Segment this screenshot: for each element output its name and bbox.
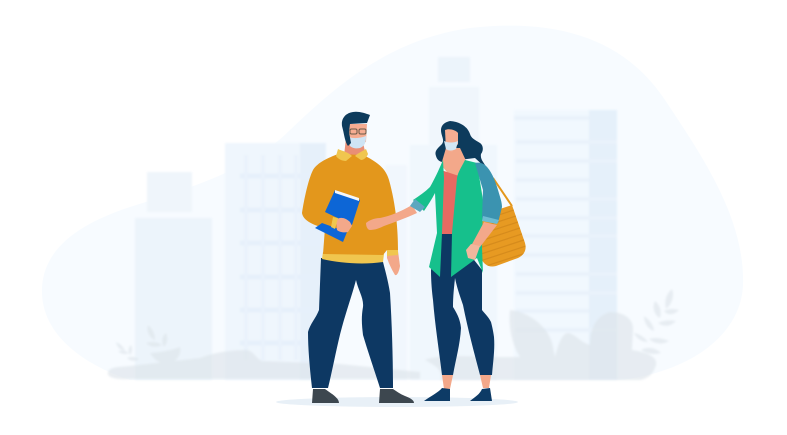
figure: woman — [366, 121, 540, 401]
woman left shoe — [424, 388, 450, 401]
woman face mask — [444, 141, 458, 150]
building: centre tower — [385, 57, 497, 380]
woman hair — [435, 121, 487, 169]
illustration: couple in masks walking in a city — [106, 55, 681, 407]
man shirt hem — [322, 250, 398, 263]
woman bag — [482, 206, 526, 266]
man trousers — [308, 258, 393, 388]
man hand, hanging — [387, 250, 400, 275]
building: left — [135, 172, 212, 380]
woman right arm — [471, 222, 497, 247]
man hand holding book — [336, 218, 352, 232]
man cuff — [331, 217, 338, 229]
man glasses — [350, 129, 366, 134]
figure: man — [302, 112, 414, 403]
building: right — [514, 110, 617, 380]
woman cardigan — [413, 160, 483, 277]
man left shoe — [312, 389, 339, 403]
woman ankles — [442, 375, 491, 389]
woman left cuff — [410, 199, 425, 212]
ground band and foliage, left — [108, 325, 420, 379]
foliage, right — [425, 289, 679, 380]
woman top — [441, 170, 459, 234]
man face mask — [349, 136, 366, 148]
bag straps — [469, 163, 512, 220]
man hair and beard — [342, 112, 370, 146]
man sweater — [302, 154, 398, 255]
woman right hand — [466, 244, 480, 260]
woman right shoe — [470, 388, 492, 401]
woman forearm and hand — [366, 205, 417, 230]
man right shoe — [379, 389, 414, 403]
book — [315, 190, 360, 242]
man collar — [336, 149, 368, 161]
woman trousers — [431, 232, 494, 375]
building: middle with windows — [225, 143, 326, 380]
ground shadow — [276, 397, 518, 407]
woman neck and chest — [441, 148, 468, 178]
woman sleeve — [475, 163, 502, 223]
woman face — [445, 129, 458, 152]
woman sleeve cuff — [482, 216, 499, 224]
background blob — [42, 26, 743, 380]
man face — [346, 124, 367, 146]
background buildings — [108, 57, 679, 380]
man neck — [344, 138, 366, 156]
